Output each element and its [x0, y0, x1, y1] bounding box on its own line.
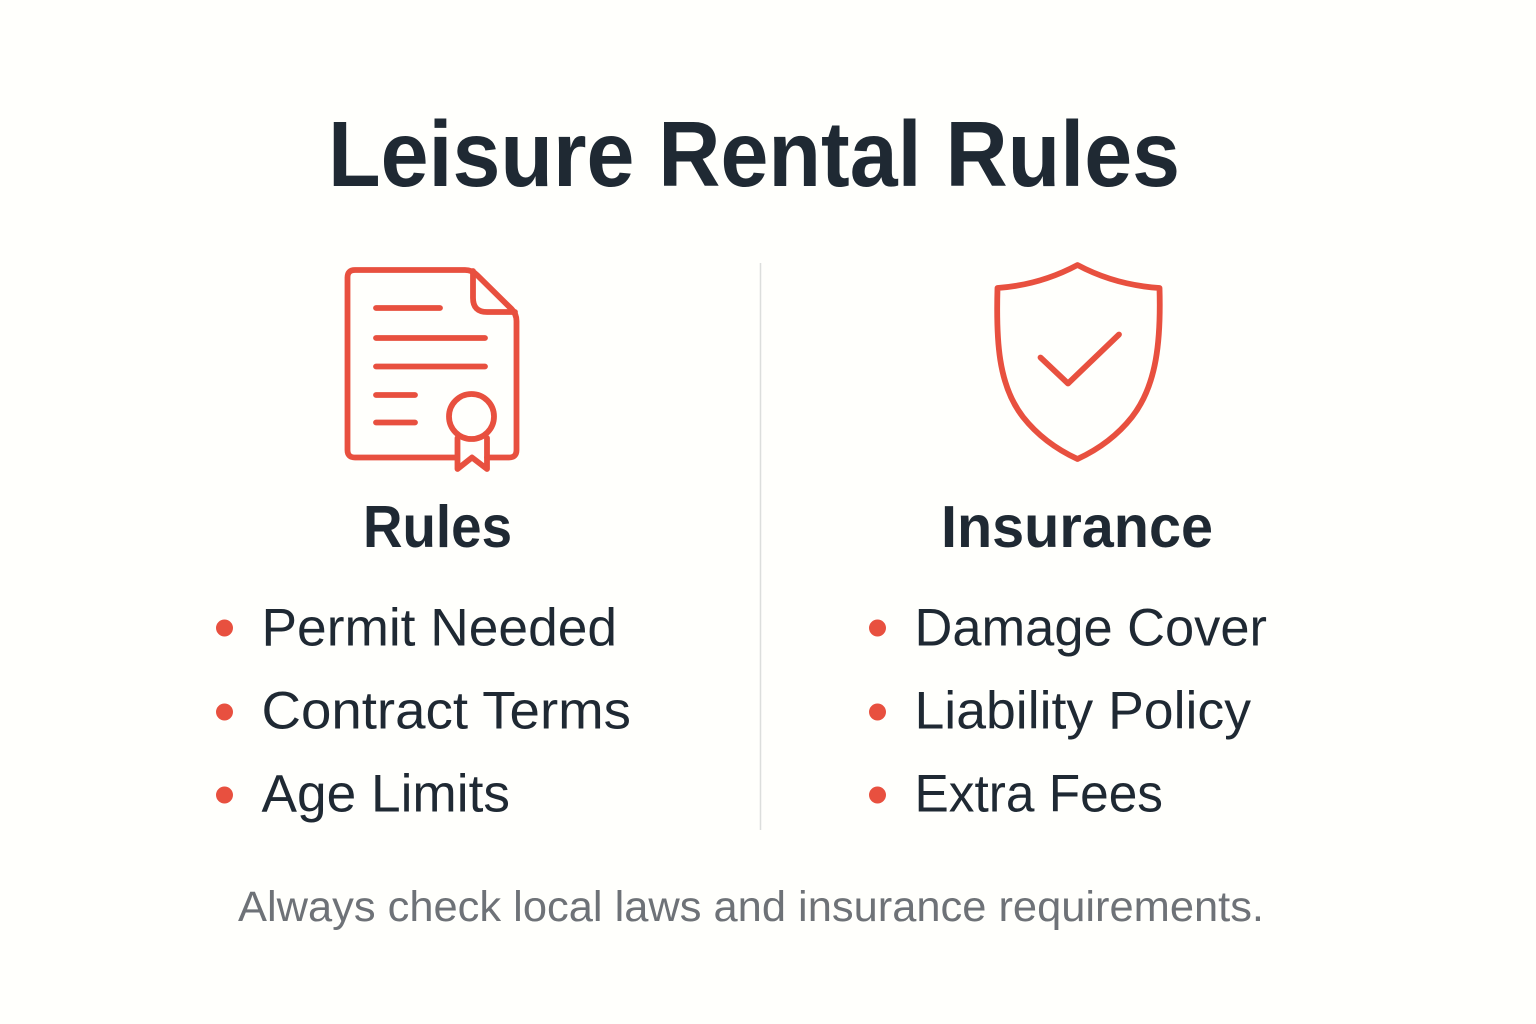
icon: document with ribbon seal — [348, 270, 516, 469]
list item: age limits: Age Limits — [262, 764, 510, 824]
panel: insurance — [869, 265, 1267, 824]
footer note: Always check local laws and insurance requirements. — [238, 883, 1264, 931]
list item: permit needed: Permit Needed — [262, 598, 617, 658]
heading: rules: Rules — [363, 494, 512, 560]
list: insurance — [869, 598, 1267, 824]
list item: contract terms: Contract Terms — [262, 682, 631, 740]
list item: liability policy: Liability Policy — [914, 682, 1252, 740]
title: Leisure Rental Rules — [328, 102, 1180, 206]
icon: shield with check mark — [997, 265, 1160, 459]
panel: rules — [216, 270, 631, 824]
list item: extra fees: Extra Fees — [914, 764, 1163, 824]
list: rules — [216, 598, 631, 824]
heading: insurance: Insurance — [941, 494, 1213, 560]
list item: damage cover: Damage Cover — [914, 598, 1267, 658]
